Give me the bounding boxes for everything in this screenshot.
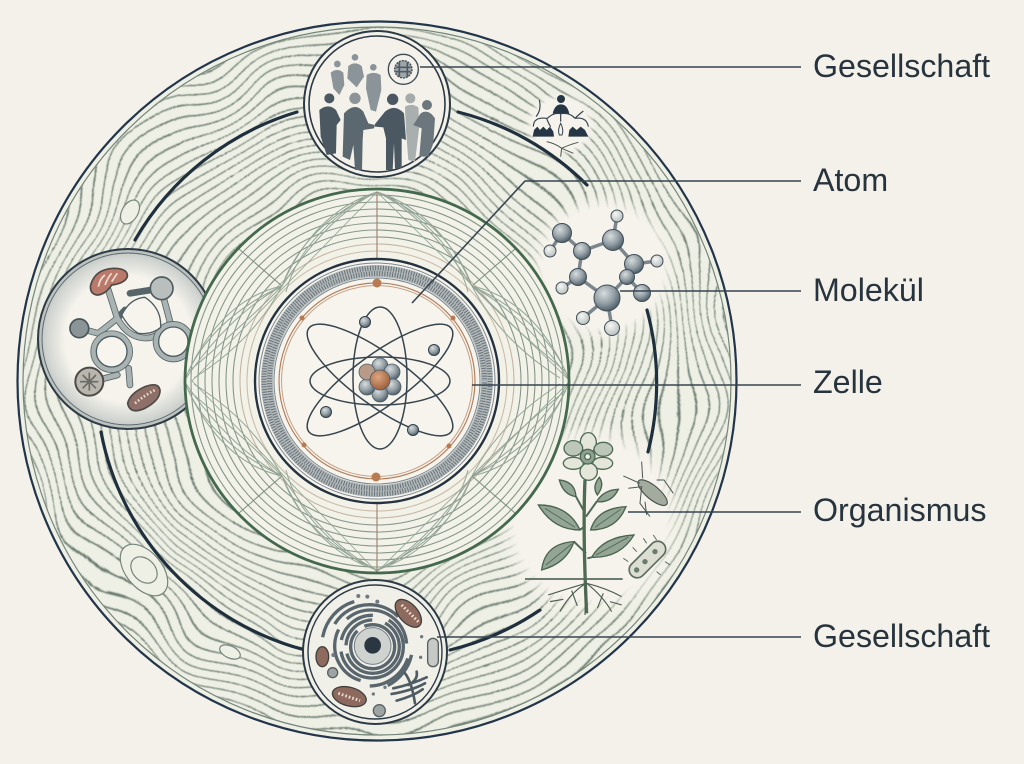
contour lines	[24, 28, 730, 734]
mitochondria	[90, 268, 127, 295]
label: Gesellschaft: Gesellschaft	[813, 48, 990, 84]
medallion: cell (bottom)	[303, 580, 447, 724]
bacterium	[623, 535, 670, 581]
atom core ring	[255, 259, 499, 503]
organism: plant, insect, bacterium	[525, 433, 673, 615]
label: Gesellschaft (bottom): Gesellschaft	[813, 618, 990, 654]
label: Zelle: Zelle	[813, 364, 883, 400]
orbits	[294, 307, 466, 453]
golgi	[392, 672, 427, 703]
paper patches behind molecule and organism	[494, 93, 686, 620]
plant	[525, 433, 634, 615]
label: Atom: Atom	[813, 162, 888, 198]
branching membrane	[79, 288, 191, 385]
mitochondria	[390, 595, 426, 632]
atom	[294, 307, 466, 453]
ring nodes	[372, 278, 382, 288]
outer ring	[18, 22, 736, 740]
back group	[331, 54, 419, 162]
contour islands	[111, 197, 243, 662]
nucleus	[359, 358, 401, 402]
electrons	[320, 316, 440, 436]
molecule	[544, 210, 663, 336]
front group	[319, 93, 435, 170]
insect	[623, 462, 673, 517]
leader lines	[412, 67, 801, 637]
label: Organismus: Organismus	[813, 492, 987, 528]
endoplasmic reticulum	[322, 600, 413, 690]
medallion: society	[304, 31, 450, 177]
inner green disk	[184, 189, 570, 573]
medallion: molecule in cell (left)	[38, 249, 218, 429]
label: Molekül: Molekül	[813, 272, 924, 308]
dark ring arcs	[101, 112, 657, 650]
outer disk	[18, 22, 736, 740]
nucleus	[354, 628, 391, 664]
community emblem	[388, 54, 418, 84]
curved web	[184, 192, 570, 572]
icon: small organisation diagram	[533, 95, 588, 157]
concentric rings	[191, 195, 563, 567]
